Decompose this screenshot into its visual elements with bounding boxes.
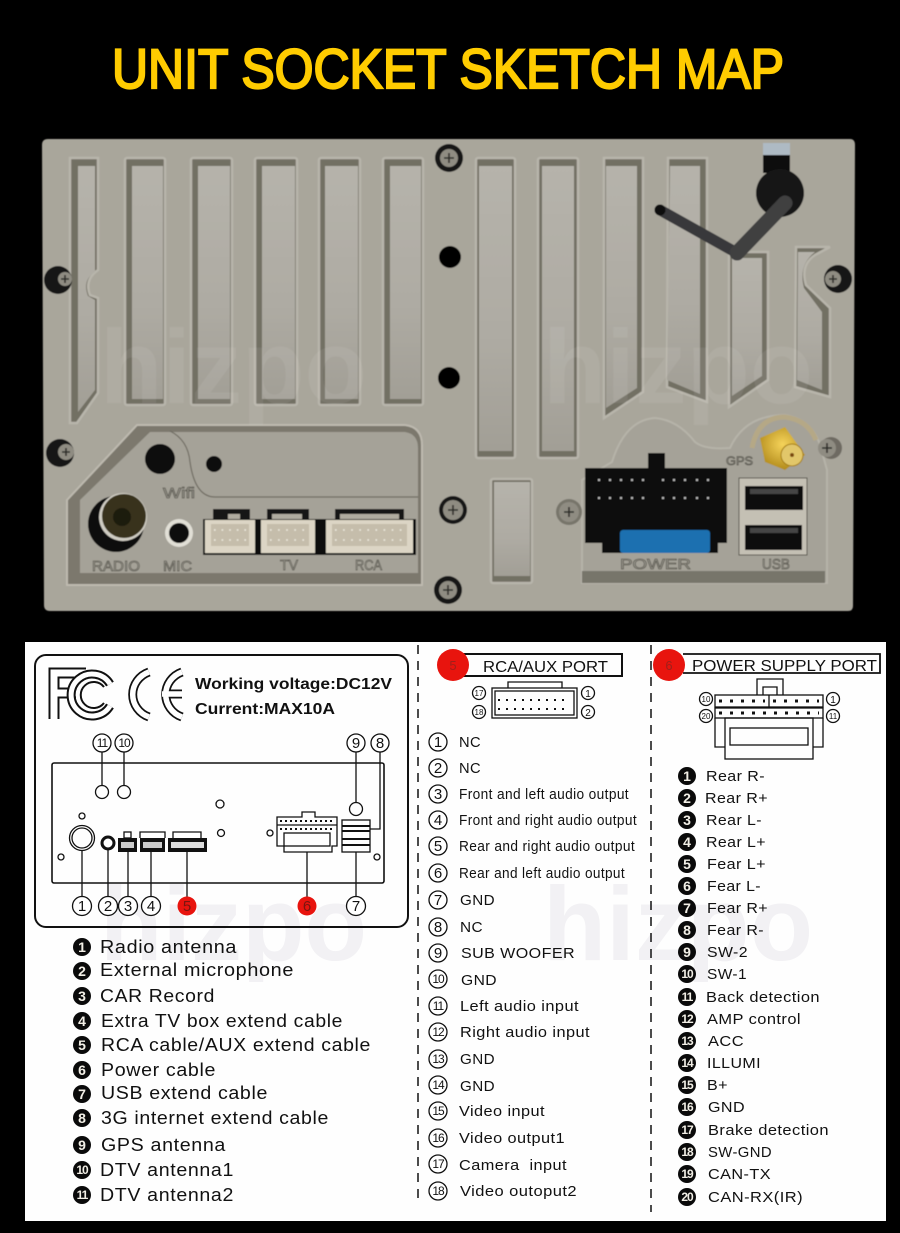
- heading: power supply port: 6: [665, 658, 673, 673]
- legend: component list: 8: [78, 1110, 86, 1126]
- power recess: [582, 415, 827, 583]
- legend: component list: 5: [78, 1037, 86, 1053]
- RCA pin list: 2: [434, 760, 442, 777]
- callout numbers: top: [93, 734, 389, 752]
- power pin list: 6: [683, 878, 691, 894]
- power pin list: Rear R+: [705, 790, 768, 807]
- legend: component list: Extra TV box extend cable: [101, 1010, 343, 1031]
- power pin list: 1: [683, 768, 691, 784]
- RCA pin list: 18: [432, 1184, 445, 1198]
- CE logo: [133, 672, 182, 717]
- power pin list: SW-1: [707, 966, 747, 983]
- RCA pin list: Camera input: [459, 1157, 567, 1174]
- power pin list: 17: [681, 1123, 694, 1137]
- RCA pin list: [429, 733, 637, 1200]
- power pin list: 11: [682, 990, 694, 1004]
- heading: RCA/AUX port: RCA/AUX PORT: [483, 659, 608, 676]
- RCA connector pinout: 2: [585, 708, 591, 719]
- power connector pinout: 11: [829, 712, 838, 721]
- RCA pin list: 7: [434, 892, 442, 909]
- connector: small harness: [203, 509, 261, 555]
- labels: power, usb, gps: GPS: [726, 454, 753, 468]
- RCA pin list: GND: [461, 972, 497, 989]
- legend: component list: 6: [78, 1062, 86, 1078]
- power pin list: 2: [683, 790, 691, 806]
- plate labels: Wifi: [163, 485, 195, 502]
- connector: RCA: [323, 509, 416, 555]
- power pin list: 16: [681, 1100, 694, 1114]
- RCA pin list: 1: [434, 734, 442, 751]
- RCA connector pinout: [472, 682, 594, 719]
- heading: power supply port: [653, 649, 880, 681]
- legend: component list: Power cable: [101, 1059, 216, 1080]
- power pin list: B+: [707, 1077, 728, 1094]
- labels: power, usb, gps: POWER: [620, 556, 691, 573]
- power pin list: 7: [683, 900, 691, 916]
- RCA pin list: 9: [434, 945, 442, 962]
- voltage text: Working voltage:DC12V: [195, 676, 393, 693]
- tan halo behind GPS: [752, 417, 816, 448]
- power pin list: 14: [681, 1056, 694, 1070]
- power pin list: 4: [683, 834, 691, 850]
- RCA pin list: 5: [434, 838, 442, 855]
- power pin list: 5: [683, 856, 691, 872]
- icon: mic socket: [165, 519, 193, 547]
- RCA pin list: Left audio input: [460, 998, 579, 1015]
- power pin list: Fear L-: [707, 878, 761, 895]
- metal plate: [42, 139, 855, 611]
- diagram sockets: [58, 786, 380, 860]
- labels: power, usb, gps: [620, 454, 790, 573]
- column dividers: [418, 645, 651, 1212]
- rear panel outline: [52, 763, 384, 883]
- RCA pin list: 8: [434, 919, 442, 936]
- panel: wiring manual: [25, 642, 886, 1221]
- legend: component list: DTV antenna1: [100, 1159, 234, 1180]
- heading: RCA/AUX port: 5: [449, 658, 457, 673]
- power pin list: 20: [681, 1190, 694, 1204]
- watermark: photo left: hizpo: [100, 309, 367, 426]
- power pin list: 15: [681, 1078, 694, 1092]
- power pin list: Back detection: [706, 989, 820, 1006]
- vent slots: [70, 158, 830, 583]
- callout numbers: bottom: 5: [183, 898, 191, 915]
- RCA pin list: Right audio input: [460, 1024, 590, 1041]
- power pin list: 19: [681, 1167, 694, 1181]
- power pin list: GND: [708, 1099, 745, 1116]
- plate labels: MIC: [163, 558, 192, 575]
- power pin list: CAN-RX(IR): [708, 1189, 803, 1206]
- icon: wifi hole: [145, 444, 175, 474]
- RCA pin list: 4: [434, 812, 442, 829]
- plate labels: RADIO: [92, 558, 140, 575]
- power pin list: Fear R+: [707, 900, 768, 917]
- legend: component list: External microphone: [100, 959, 294, 980]
- RCA pin list: 16: [432, 1131, 445, 1145]
- power pin list: Rear L+: [706, 834, 766, 851]
- callout numbers: bottom: [72, 896, 366, 916]
- RCA pin list: 10: [432, 972, 445, 986]
- RCA pin list: 13: [432, 1052, 445, 1066]
- RCA pin list: Video input: [459, 1103, 545, 1120]
- legend: component list: 1: [78, 939, 86, 955]
- legend: component list: USB extend cable: [101, 1082, 268, 1103]
- RCA pin list: 6: [434, 865, 442, 882]
- RCA pin list: 3: [434, 786, 442, 803]
- power pin list: Rear R-: [706, 768, 765, 785]
- callout numbers: top: 8: [376, 735, 384, 752]
- legend: component list: 3: [78, 988, 86, 1004]
- RCA pin list: NC: [459, 760, 481, 777]
- RCA pin list: Video outoput2: [460, 1183, 577, 1200]
- heading: RCA/AUX port: [437, 649, 622, 681]
- legend: component list: 3G internet extend cable: [101, 1107, 329, 1128]
- panel: RCA/AUX port: [429, 649, 637, 1200]
- icon: small hole: [206, 456, 222, 472]
- callout numbers: bottom: 3: [124, 898, 132, 915]
- RCA pin list: 15: [432, 1104, 445, 1118]
- power pin list: 18: [681, 1145, 694, 1159]
- power pin list: 10: [681, 967, 694, 981]
- heading: power supply port: POWER SUPPLY PORT: [692, 658, 877, 675]
- RCA pin list: NC: [460, 919, 483, 936]
- power pin list: SW-GND: [708, 1144, 772, 1161]
- socket band: [203, 509, 416, 555]
- callout numbers: top: 9: [352, 735, 360, 752]
- legend: component list: GPS antenna: [101, 1134, 226, 1155]
- power pin list: Fear L+: [707, 856, 766, 873]
- diagram frame: [35, 655, 408, 927]
- power connector pinout: 20: [702, 712, 711, 721]
- RCA pin list: GND: [460, 1051, 495, 1068]
- callout numbers: bottom: 6: [303, 898, 311, 915]
- antenna grommet and cable: [654, 143, 804, 253]
- plate labels: [92, 485, 382, 575]
- power pin list: Fear R-: [707, 922, 764, 939]
- RCA connector pinout: 17: [475, 689, 484, 698]
- legend: component list: 11: [77, 1188, 89, 1202]
- legend: component list: CAR Record: [100, 985, 215, 1006]
- RCA pin list: GND: [460, 1078, 495, 1095]
- RCA pin list: Video output1: [459, 1130, 565, 1147]
- RCA pin list: 12: [432, 1025, 445, 1039]
- callout numbers: bottom: 7: [352, 898, 360, 915]
- power connector pinout: 1: [830, 695, 836, 706]
- power connector: [585, 453, 727, 553]
- plate labels: TV: [280, 557, 298, 574]
- power connector pinout: [700, 679, 840, 759]
- connector: TV: [258, 509, 326, 555]
- screws: [44, 144, 852, 604]
- RCA pin list: SUB WOOFER: [461, 945, 575, 962]
- RCA pin list: 17: [432, 1157, 445, 1171]
- watermark: photo right: hizpo: [543, 309, 813, 426]
- RCA pin list: NC: [459, 734, 481, 751]
- RCA pin list: Rear and right audio output: [459, 838, 635, 855]
- legend: component list: RCA cable/AUX extend cable: [101, 1034, 371, 1055]
- legend: component list: 10: [76, 1163, 89, 1177]
- plate labels: RCA: [355, 557, 382, 574]
- power pin list: 13: [681, 1034, 694, 1048]
- power pin list: 3: [683, 812, 691, 828]
- current text: Current:MAX10A: [195, 701, 335, 718]
- power pin list: 8: [683, 922, 691, 938]
- callout numbers: top: 11: [97, 736, 109, 750]
- lower-left recess: [67, 425, 422, 585]
- FCC logo: [54, 673, 110, 719]
- RCA connector pinout: 1: [585, 689, 591, 700]
- legend: component list: 7: [78, 1086, 86, 1102]
- power pin list: [678, 767, 829, 1206]
- power pin list: Brake detection: [708, 1122, 829, 1139]
- power pin list: CAN-TX: [708, 1166, 771, 1183]
- legend: component list: DTV antenna2: [100, 1184, 234, 1205]
- labels: power, usb, gps: USB: [762, 556, 790, 573]
- RCA pin list: 14: [432, 1078, 445, 1092]
- RCA pin list: GND: [460, 892, 495, 909]
- callout numbers: bottom: 4: [147, 898, 155, 915]
- power pin list: 12: [681, 1012, 694, 1026]
- legend: component list: 9: [78, 1137, 86, 1153]
- RCA connector pinout: 18: [475, 708, 484, 717]
- legend: component list: [73, 936, 371, 1205]
- RCA pin list: Front and left audio output: [459, 786, 629, 803]
- panel: power supply port: [653, 649, 880, 1206]
- power pin list: SW-2: [707, 944, 748, 961]
- legend: component list: 4: [78, 1013, 86, 1029]
- power connector pinout: 10: [702, 695, 711, 704]
- watermark: sheet left: hizpo: [100, 866, 367, 983]
- callout numbers: top: 10: [118, 736, 131, 750]
- RCA pin list: Front and right audio output: [459, 812, 637, 829]
- power pin list: ILLUMI: [707, 1055, 761, 1072]
- USB ports: [739, 478, 807, 555]
- panel: unit rear photo: [42, 139, 855, 611]
- power pin list: 9: [683, 944, 691, 960]
- icon: radio antenna socket: [88, 493, 147, 552]
- leader lines: [82, 752, 380, 897]
- power pin list: AMP control: [707, 1011, 801, 1028]
- GPS connector: [760, 427, 805, 470]
- callout numbers: bottom: 2: [104, 898, 112, 915]
- RCA pin list: 11: [433, 999, 445, 1013]
- watermark: sheet right: hizpo: [543, 866, 813, 983]
- power pin list: Rear L-: [706, 812, 762, 829]
- panel: unit diagram: [35, 655, 408, 927]
- legend: component list: 2: [78, 963, 86, 979]
- legend: component list: Radio antenna: [100, 936, 237, 957]
- power pin list: ACC: [708, 1033, 744, 1050]
- RCA pin list: Rear and left audio output: [459, 865, 625, 882]
- title: UNIT SOCKET SKETCH MAP: [112, 37, 784, 100]
- manual sheet: [25, 642, 886, 1221]
- callout numbers: bottom: 1: [78, 898, 86, 915]
